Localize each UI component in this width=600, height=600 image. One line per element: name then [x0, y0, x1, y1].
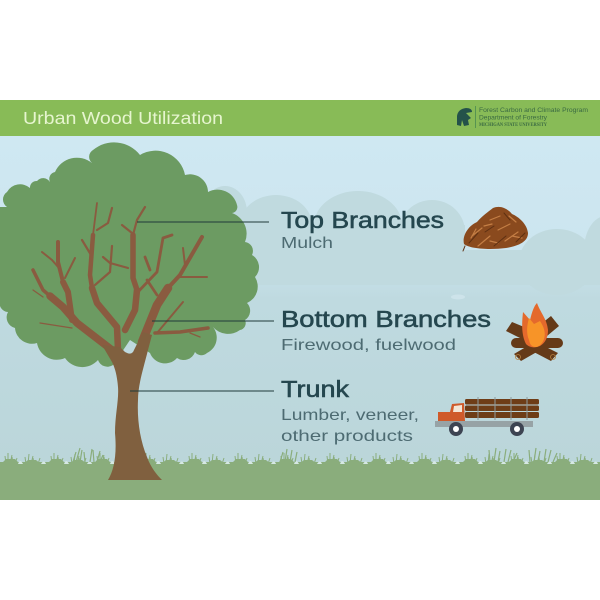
label: top branches — [281, 207, 444, 252]
grass — [0, 446, 600, 464]
tree — [0, 142, 259, 480]
icon: campfire — [506, 303, 563, 361]
label: bottom branches: Firewood, fuelwood — [281, 337, 456, 354]
logo text: Forest Carbon and Climate Program — [479, 107, 588, 114]
trunk — [102, 332, 162, 480]
icon: logging truck — [435, 397, 539, 436]
icon: mulch pile — [463, 207, 528, 251]
title: Urban Wood Utilization — [23, 108, 223, 128]
logo text — [479, 107, 588, 128]
logo text: MICHIGAN STATE UNIVERSITY — [479, 123, 547, 128]
background clouds — [200, 186, 600, 300]
label: trunk: Trunk — [281, 376, 350, 402]
branches — [33, 203, 208, 350]
ground — [0, 462, 600, 500]
cab — [438, 403, 465, 421]
tree canopy — [0, 142, 259, 367]
label: trunk — [281, 376, 419, 445]
label: bottom branches — [281, 306, 491, 354]
leader lines — [130, 222, 274, 391]
sky background — [0, 136, 600, 462]
label: trunk: other products — [281, 428, 413, 445]
flatbed — [435, 421, 533, 427]
wheels — [449, 422, 463, 436]
header bar — [0, 100, 600, 136]
label: trunk: Lumber, veneer, — [281, 407, 419, 424]
logs — [465, 399, 539, 418]
label: bottom branches: Bottom Branches — [281, 306, 491, 332]
small cloud wisp — [451, 294, 465, 300]
logo: spartan helmet — [457, 106, 588, 128]
label: top branches: Top Branches — [281, 207, 444, 233]
logo text: Department of Forestry — [479, 114, 548, 122]
label: top branches: Mulch — [281, 235, 333, 252]
flame — [522, 303, 548, 347]
